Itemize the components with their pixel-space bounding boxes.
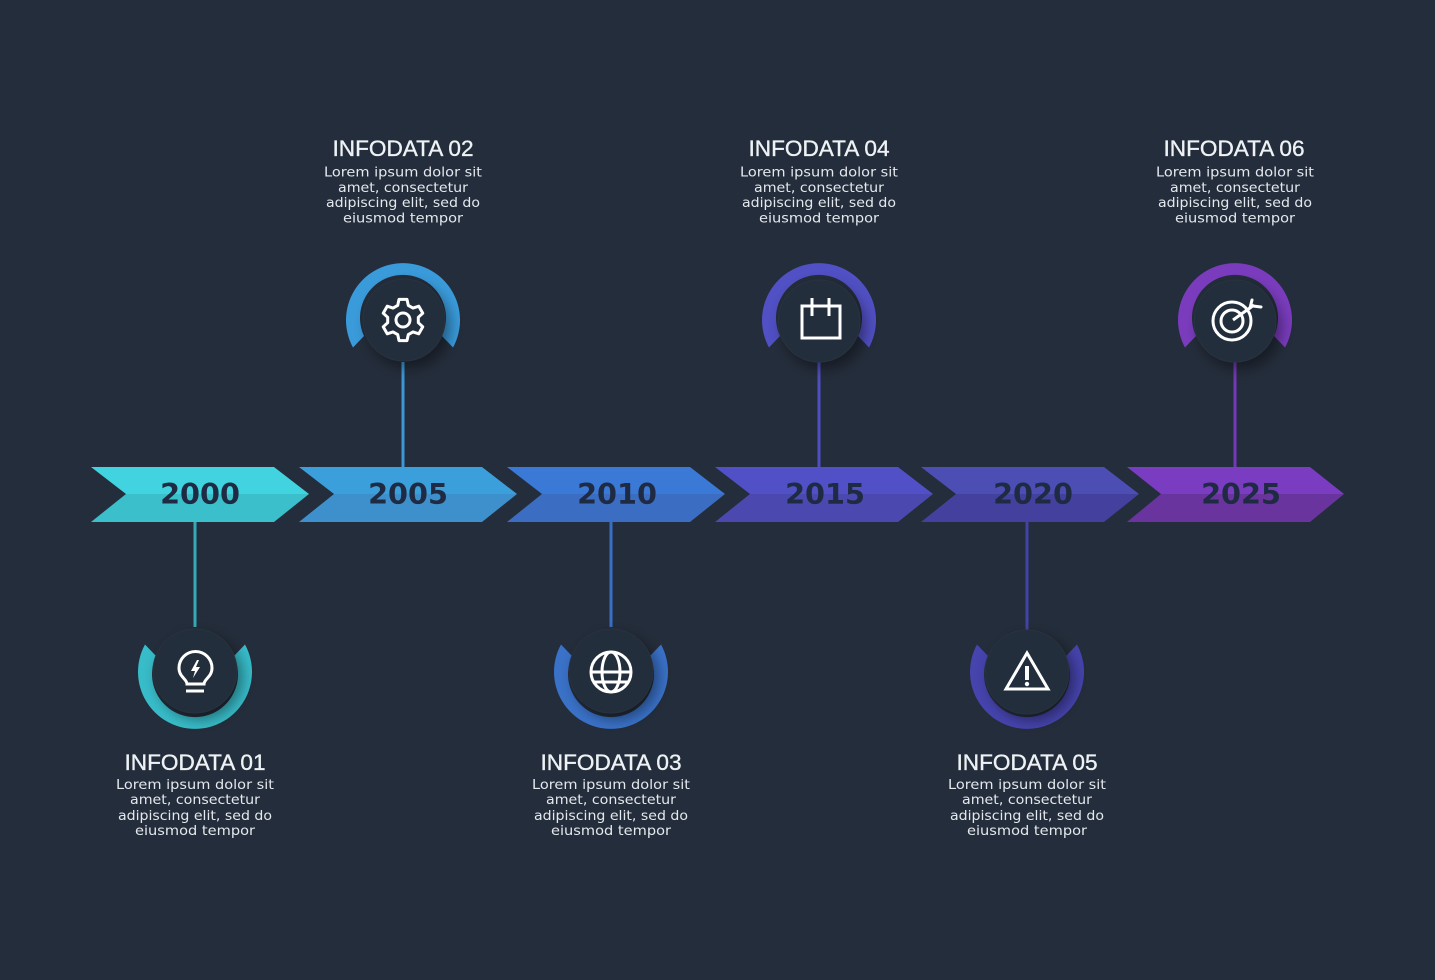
icon: calendar bbox=[802, 298, 840, 338]
text: infodata 05: INFODATA 05 bbox=[956, 750, 1098, 775]
node 03: ring and globe icon bbox=[554, 629, 668, 729]
node 05: ring and warning icon bbox=[970, 630, 1084, 729]
text: infodata 05: adipiscing elit, sed do bbox=[950, 808, 1104, 824]
timeline arrow 2010 bbox=[507, 467, 725, 522]
text: infodata 03: Lorem ipsum dolor sit bbox=[532, 777, 690, 793]
timeline arrow 2025 bbox=[1127, 467, 1344, 522]
text: infodata 03: eiusmod tempor bbox=[551, 823, 671, 839]
text: infodata 05 bbox=[948, 750, 1106, 839]
text: infodata 03: adipiscing elit, sed do bbox=[534, 808, 688, 824]
text: infodata 01: amet, consectetur bbox=[130, 792, 260, 808]
timeline arrow 2020: 2020 bbox=[993, 477, 1073, 511]
text: infodata 01: Lorem ipsum dolor sit bbox=[116, 777, 274, 793]
timeline arrow 2005: 2005 bbox=[368, 477, 448, 511]
text: infodata 01: adipiscing elit, sed do bbox=[118, 808, 272, 824]
icon: gear bbox=[383, 299, 423, 341]
connector lines bbox=[195, 362, 1235, 630]
text: infodata 02: amet, consectetur bbox=[338, 180, 468, 196]
timeline arrow 2000 bbox=[91, 467, 309, 522]
text: infodata 02: eiusmod tempor bbox=[343, 210, 463, 226]
text: infodata 01: INFODATA 01 bbox=[124, 750, 266, 775]
timeline arrow 2020 bbox=[921, 467, 1139, 522]
icon: target with arrow bbox=[1213, 300, 1261, 340]
text: infodata 06: eiusmod tempor bbox=[1175, 210, 1295, 226]
timeline arrow 2015: 2015 bbox=[785, 477, 865, 511]
text: infodata 04: amet, consectetur bbox=[754, 180, 884, 196]
timeline arrow 2010: 2010 bbox=[577, 477, 657, 511]
text: infodata 06: Lorem ipsum dolor sit bbox=[1156, 164, 1314, 180]
text: infodata 03: INFODATA 03 bbox=[540, 750, 682, 775]
text: infodata 06 bbox=[1156, 136, 1314, 226]
text: infodata 06: adipiscing elit, sed do bbox=[1158, 195, 1312, 211]
icon: globe bbox=[591, 652, 631, 692]
text: infodata 03 bbox=[532, 750, 690, 839]
text: infodata 03: amet, consectetur bbox=[546, 792, 676, 808]
node 02: ring and gear icon bbox=[346, 263, 460, 361]
text: infodata 05: amet, consectetur bbox=[962, 792, 1092, 808]
text: infodata 02: INFODATA 02 bbox=[332, 136, 474, 161]
text: infodata 05: Lorem ipsum dolor sit bbox=[948, 777, 1106, 793]
timeline arrow 2025: 2025 bbox=[1201, 477, 1281, 511]
text: infodata 04: eiusmod tempor bbox=[759, 210, 879, 226]
icon: lightbulb bbox=[179, 652, 212, 691]
timeline arrow 2015 bbox=[715, 467, 933, 522]
text: infodata 05: eiusmod tempor bbox=[967, 823, 1087, 839]
text: infodata 04: Lorem ipsum dolor sit bbox=[740, 164, 898, 180]
text: infodata 04 bbox=[740, 136, 898, 226]
text: infodata 06: INFODATA 06 bbox=[1164, 136, 1304, 161]
timeline arrow 2000: 2000 bbox=[160, 477, 240, 511]
text: infodata 04: INFODATA 04 bbox=[748, 136, 890, 161]
text: infodata 02: adipiscing elit, sed do bbox=[326, 195, 480, 211]
icon: warning triangle bbox=[1006, 653, 1048, 689]
text: infodata 06: amet, consectetur bbox=[1170, 180, 1300, 196]
text: infodata 04: adipiscing elit, sed do bbox=[742, 195, 896, 211]
node 06: ring and target icon bbox=[1178, 263, 1292, 362]
timeline arrow 2005 bbox=[299, 467, 517, 522]
text: infodata 02: Lorem ipsum dolor sit bbox=[324, 164, 482, 180]
node 01: ring and lightbulb icon bbox=[138, 629, 252, 729]
node 04: ring and calendar icon bbox=[762, 263, 876, 362]
text: infodata 01 bbox=[116, 750, 274, 839]
text: infodata 01: eiusmod tempor bbox=[135, 823, 255, 839]
text: infodata 02 bbox=[324, 136, 482, 226]
